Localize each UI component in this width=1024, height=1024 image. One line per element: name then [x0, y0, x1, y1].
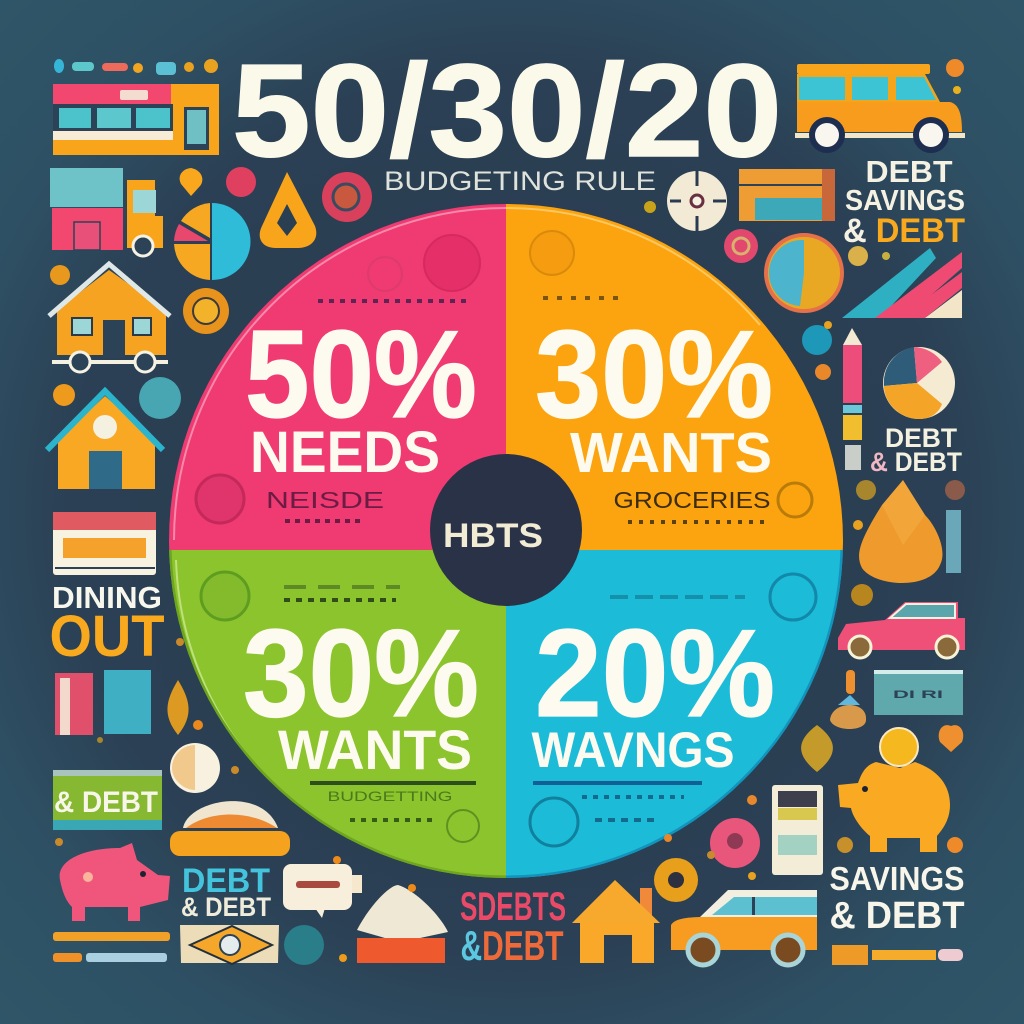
- text: debt savings & debt: & DEBT: [843, 212, 965, 250]
- text: savings & debt: [830, 860, 964, 937]
- dashes on pie: [284, 298, 764, 820]
- label: debt banner: & DEBT: [54, 786, 158, 819]
- 30% wants green label: WANTS: [278, 718, 472, 781]
- icon: folder stack: [739, 169, 835, 221]
- small caption green: BUDGETTING: [328, 788, 452, 804]
- icon: swirl coin: [724, 229, 758, 263]
- bar bottom right: [832, 945, 963, 965]
- icon: gauge: [766, 235, 842, 311]
- icon: envelope pile: [357, 885, 448, 963]
- icon: small pie right: [883, 347, 955, 419]
- text: dining out: OUT: [50, 604, 164, 669]
- text: dining out: DINING: [52, 580, 162, 615]
- icon: house two: [47, 391, 163, 489]
- icon: bottom house: [572, 880, 660, 963]
- icon: receipt: [772, 785, 823, 875]
- icon: coin: [183, 288, 229, 334]
- text: savings & debt: SAVINGS: [830, 860, 964, 897]
- icon: gold coin bottom: [654, 858, 698, 902]
- icon: piggy bank orange: [838, 728, 950, 852]
- icon: bottom car: [671, 890, 817, 965]
- text: debt savings & debt: [843, 154, 965, 250]
- icon: banknote: [874, 670, 963, 715]
- icon: crosshair: [667, 171, 727, 231]
- text: debt & debt: & DEBT: [181, 892, 271, 922]
- icon: eye envelope: [180, 925, 279, 964]
- text: debt & debt: [181, 862, 271, 922]
- icon: speech bubble: [283, 864, 362, 918]
- icon: ruler triangle: [842, 248, 962, 318]
- icon: teal check: [802, 325, 832, 355]
- icon: books: [55, 670, 151, 735]
- center circle: HBTS: [443, 517, 543, 555]
- icon: heart: [939, 725, 963, 752]
- text: sdebts & debt: SDEBTS: [460, 885, 566, 929]
- icon: piggy bank red: [60, 843, 170, 921]
- icon: top van: [795, 64, 965, 150]
- text: debt savings & debt: DEBT: [866, 154, 953, 189]
- small caption groceries: GROCERIES: [614, 487, 770, 513]
- icon: small vase: [830, 670, 866, 729]
- text: debt & debt right: DEBT: [885, 423, 957, 453]
- icon: red coin: [710, 818, 760, 868]
- text: savings & debt: & DEBT: [830, 895, 964, 937]
- 50% needs label: 50%: [245, 306, 477, 444]
- icon: leaf: [167, 680, 189, 735]
- icon: leaf right: [801, 725, 833, 772]
- 30% wants green label: 30%: [243, 605, 479, 743]
- 50% needs label: NEEDS: [250, 420, 440, 485]
- text: sdebts & debt: &DEBT: [460, 922, 564, 969]
- 30% wants orange label: 30%: [535, 306, 773, 444]
- icon: banknote: DI RI: [893, 689, 943, 701]
- text: debt savings & debt: SAVINGS: [845, 185, 965, 217]
- pie chart: [160, 200, 852, 885]
- segment: wants green: [160, 550, 506, 885]
- icon: red car: [838, 602, 965, 658]
- text: debt & debt: DEBT: [182, 862, 270, 900]
- icon: storefront: [53, 84, 219, 155]
- bars bottom left: [53, 932, 170, 962]
- icon: card: [53, 512, 156, 575]
- 20% savings label: 20%: [535, 605, 775, 743]
- icon: gem drop: [859, 480, 961, 583]
- scattered dots: [50, 59, 965, 962]
- subtitle: BUDGETING RULE: [384, 166, 656, 196]
- text: debt & debt right: & DEBT: [870, 447, 962, 477]
- segment: wants orange: [506, 200, 852, 550]
- 30% wants orange label: WANTS: [570, 421, 772, 485]
- icon: pie: [174, 203, 250, 280]
- small icons on pie: [196, 231, 816, 846]
- center circle: [430, 454, 582, 606]
- label: debt banner: [53, 770, 162, 830]
- icon: house one: [49, 264, 170, 372]
- icon: plate: [170, 743, 220, 793]
- small caption needs: NEISDE: [266, 487, 384, 513]
- icon: loaf: [170, 801, 290, 856]
- segment: needs: [160, 200, 506, 550]
- 20% savings label: WAVNGS: [532, 722, 734, 778]
- title: 50/30/20: [232, 37, 782, 184]
- text: dining out: [50, 580, 164, 669]
- segment: savings: [506, 550, 852, 885]
- icon: shop with truck: [50, 168, 163, 256]
- icon: pencil: [843, 328, 862, 470]
- coin over piggy: [880, 728, 918, 766]
- icon: globe small: [284, 925, 324, 965]
- text: sdebts & debt: [460, 885, 566, 969]
- text: debt & debt right: [870, 423, 962, 477]
- icon: small orange heart: [180, 168, 202, 196]
- icon: coin ring: [322, 172, 372, 222]
- icon: globe: [139, 377, 181, 419]
- icon: drop: [260, 172, 316, 248]
- icon: small red coin: [226, 167, 256, 197]
